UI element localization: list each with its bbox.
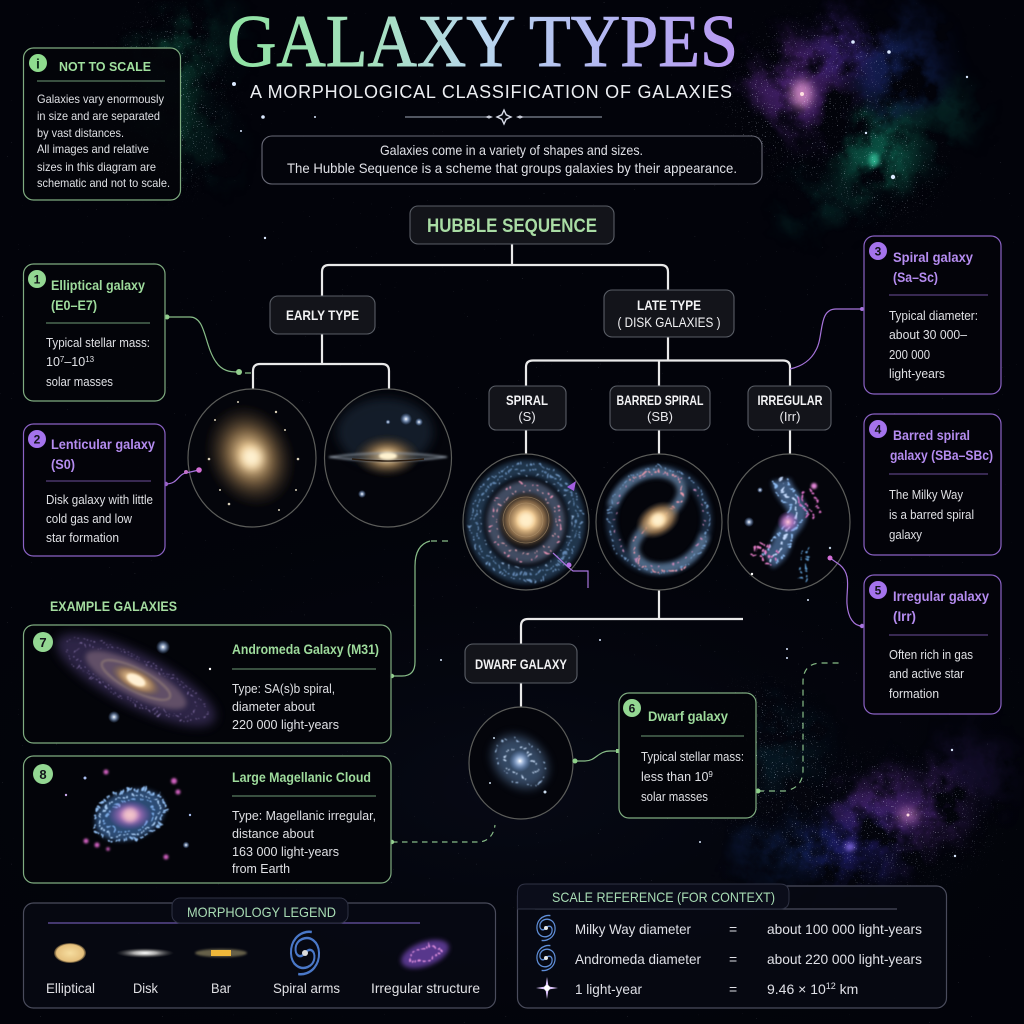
panel: intro [262, 136, 762, 184]
text: scale note: in size and are separated [37, 109, 160, 123]
icon: info: i [36, 56, 40, 72]
heading: example galaxies: EXAMPLE GALAXIES [50, 598, 177, 614]
node: dwarf galaxy [465, 644, 577, 683]
callout title [893, 588, 989, 624]
badge 3: 3 [875, 244, 882, 258]
scale row: light-year: 12 [826, 981, 836, 991]
badge 1: 1 [34, 272, 41, 286]
legend heading tab: MORPHOLOGY LEGEND [187, 904, 336, 920]
callout title: (S0) [51, 456, 75, 472]
callout 3: spiral galaxy [864, 236, 1001, 394]
callout text: light-years [889, 367, 945, 381]
node: spiral: (S) [518, 409, 536, 424]
callout text: Typical diameter: [889, 309, 978, 323]
badge 8: 8 [39, 767, 47, 782]
heading: not to scale: NOT TO SCALE [59, 59, 151, 74]
galaxy: irregular [728, 454, 850, 590]
badge 4 [869, 420, 887, 438]
panel: andromeda [24, 617, 391, 743]
panel text: Type: SA(s)b spiral, [232, 682, 335, 696]
scale row: milky way: about 100 000 light-years [767, 921, 922, 937]
panel text [232, 682, 339, 732]
callout text: star formation [46, 531, 119, 545]
legend item: bar [195, 949, 247, 996]
image: magellanic cloud [65, 770, 191, 860]
callout text: 200 000 [889, 348, 930, 362]
callout title: Dwarf galaxy [648, 708, 728, 724]
scale row: light-year: = [729, 981, 737, 997]
node: barred spiral: BARRED SPIRAL [616, 392, 704, 408]
scale row: light-year [536, 977, 858, 999]
panel: scale reference [518, 884, 946, 1008]
node: barred spiral [610, 386, 710, 430]
panel text [232, 809, 376, 876]
text: scale note: Galaxies vary enormously [37, 92, 164, 106]
callout text: Often rich in gas [889, 648, 973, 662]
callout text: Typical stellar mass: [46, 336, 150, 350]
callout 1: elliptical galaxy [24, 264, 165, 401]
legend item: irregular structure [371, 934, 480, 996]
callout text: galaxy [889, 528, 923, 542]
callout 5: irregular galaxy [864, 575, 1001, 714]
panel text: diameter about [232, 700, 316, 714]
callout title: (Sa–Sc) [893, 269, 938, 285]
scale row: andromeda: = [729, 951, 737, 967]
subtitle: A MORPHOLOGICAL CLASSIFICATION OF GALAXIES [250, 82, 732, 102]
panel text: Type: Magellanic irregular, [232, 809, 376, 823]
galaxy: lenticular [324, 389, 452, 527]
ornament divider [405, 110, 602, 124]
panel: not to scale [24, 48, 180, 200]
callout text: 7 [60, 355, 65, 364]
node: barred spiral: (SB) [647, 409, 673, 424]
panel title: Large Magellanic Cloud [232, 769, 371, 785]
callout text: Disk galaxy with little [46, 493, 153, 507]
callout text: The Milky Way [889, 488, 964, 502]
scale row: milky way: Milky Way diameter [575, 921, 691, 937]
callout 2: lenticular galaxy [24, 424, 165, 556]
panel text: 220 000 light-years [232, 718, 339, 732]
text: scale note: schematic and not to scale. [37, 176, 170, 190]
badge 8 [33, 764, 53, 784]
badge 1 [28, 270, 46, 288]
callout text [889, 648, 973, 701]
panel title: Andromeda Galaxy (M31) [232, 641, 379, 657]
badge 7: 7 [39, 635, 47, 650]
callout text: and active star [889, 667, 964, 681]
galaxy: spiral [463, 454, 589, 590]
callout title: galaxy (SBa–SBc) [890, 447, 993, 463]
callout text: is a barred spiral [889, 508, 974, 522]
legend item: elliptical [46, 943, 95, 996]
scale row: andromeda: Andromeda diameter [575, 951, 701, 967]
callout title [893, 249, 973, 285]
galaxy: barred spiral [596, 454, 722, 590]
legend item: irregular structure: Irregular structure [371, 980, 480, 996]
callout text: Typical stellar mass: [641, 750, 744, 764]
node: irregular: (Irr) [780, 409, 800, 424]
node: dwarf galaxy: DWARF GALAXY [475, 656, 568, 672]
callout text: 10 [46, 355, 60, 369]
panel: morphology legend [24, 898, 496, 1008]
node: hubble sequence: HUBBLE SEQUENCE [427, 216, 597, 237]
badge 2: 2 [34, 432, 41, 446]
callout title: (E0–E7) [51, 297, 97, 313]
node: late type [604, 290, 734, 337]
galaxy: dwarf [469, 707, 573, 819]
scale heading tab: SCALE REFERENCE (FOR CONTEXT) [552, 889, 775, 905]
connector: dwarf galaxy [572, 749, 619, 764]
panel text: from Earth [232, 862, 290, 876]
callout text [46, 336, 150, 389]
connector: elliptical [164, 314, 251, 375]
badge 5: 5 [875, 584, 882, 598]
callout text: 13 [85, 355, 95, 364]
panel: intro: Galaxies come in a variety of shapes and sizes. [380, 142, 643, 158]
node: late type: LATE TYPE [637, 297, 701, 313]
badge 3 [869, 242, 887, 260]
badge 2 [28, 430, 46, 448]
node: irregular: IRREGULAR [758, 392, 822, 408]
node: irregular [748, 386, 831, 430]
connector: andromeda [390, 541, 448, 678]
callout text: about 30 000– [889, 328, 967, 342]
legend heading tab [172, 898, 348, 923]
connector: dwarf callout dashed [756, 663, 840, 794]
callout title [51, 436, 155, 472]
connector: magellanic [390, 825, 495, 844]
callout text: cold gas and low [46, 512, 133, 526]
marker: spiral artefacts [553, 481, 588, 588]
callout text: –10 [64, 355, 85, 369]
node: spiral: SPIRAL [506, 392, 548, 408]
text: scale note: All images and relative [37, 142, 149, 156]
scale heading tab [518, 884, 789, 909]
callout 4: barred spiral galaxy [864, 414, 1001, 555]
panel: intro: The Hubble Sequence is a scheme that groups galaxies by their appearance. [287, 160, 737, 176]
connector: irregular callout [828, 556, 864, 628]
panel text: 163 000 light-years [232, 845, 339, 859]
callout title: Irregular galaxy [893, 588, 989, 604]
callout text [641, 750, 744, 804]
node: late type: ( DISK GALAXIES ) [618, 314, 720, 330]
callout title: Lenticular galaxy [51, 436, 155, 452]
text: scale note [37, 92, 170, 190]
scale row: milky way [537, 915, 922, 941]
callout text [889, 488, 974, 542]
legend item: spiral arms [273, 932, 340, 996]
badge 7 [33, 632, 53, 652]
legend item: elliptical: Elliptical [46, 980, 95, 996]
node: hubble sequence [410, 206, 614, 244]
callout text: solar masses [641, 790, 708, 804]
node: early type [270, 296, 375, 334]
legend item: disk: Disk [133, 980, 159, 996]
tree connectors [253, 244, 790, 707]
badge 6: 6 [629, 702, 636, 716]
callout title: Spiral galaxy [893, 249, 973, 265]
callout 6: dwarf galaxy [619, 693, 756, 818]
callout text: 9 [708, 770, 713, 779]
scale row: andromeda [537, 945, 922, 971]
callout text: less than 10 [641, 770, 708, 784]
badge 4: 4 [875, 422, 882, 436]
panel: large magellanic cloud [24, 756, 391, 883]
callout text: solar masses [46, 375, 113, 389]
text: scale note: by vast distances. [37, 126, 124, 140]
callout text [46, 493, 153, 545]
connector: spiral callout [790, 307, 864, 369]
title: GALAXY TYPES [227, 1, 738, 83]
text: scale note: sizes in this diagram are [37, 160, 156, 174]
callout title: (Irr) [893, 608, 916, 624]
callout title [890, 427, 993, 463]
legend item: disk [116, 948, 174, 996]
node: spiral [489, 386, 566, 430]
callout text: formation [889, 687, 939, 701]
callout title: Elliptical galaxy [51, 277, 145, 293]
galaxy: elliptical [187, 388, 316, 527]
panel text: distance about [232, 827, 315, 841]
legend item: bar: Bar [211, 980, 231, 996]
callout title: Barred spiral [893, 427, 970, 443]
connector: lenticular [164, 467, 202, 486]
icon: info [29, 54, 47, 72]
callout text [889, 309, 978, 381]
scale row: light-year: km [836, 981, 858, 997]
scale row: light-year: 9.46 × 10 [767, 981, 826, 997]
scale row: light-year: 1 light-year [575, 981, 642, 997]
scale row: andromeda: about 220 000 light-years [767, 951, 922, 967]
legend item: spiral arms: Spiral arms [273, 980, 340, 996]
callout title [51, 277, 145, 313]
scale row: milky way: = [729, 921, 737, 937]
image: andromeda galaxy [46, 617, 226, 743]
node: early type: EARLY TYPE [286, 307, 359, 323]
